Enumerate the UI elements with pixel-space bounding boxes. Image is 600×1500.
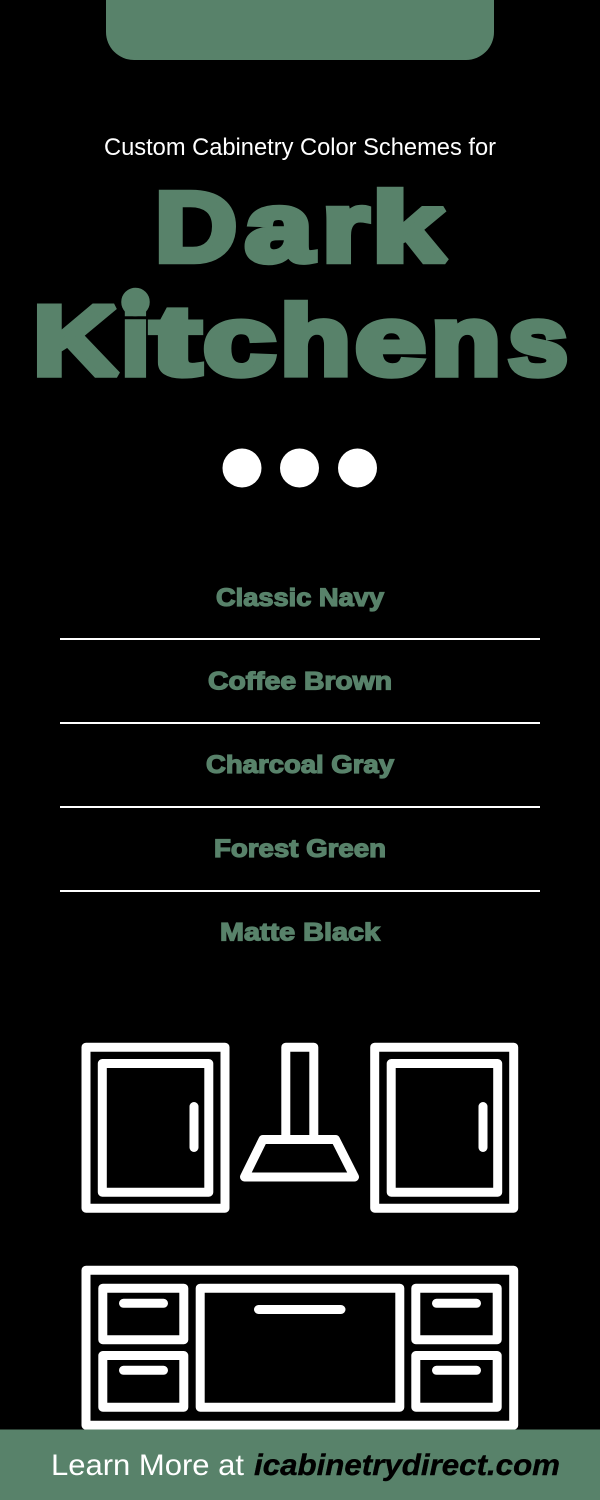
title: k xyxy=(372,172,446,282)
three dots xyxy=(222,448,377,488)
title: r xyxy=(322,172,369,282)
item: Classic Navy: Classic Navy xyxy=(216,584,384,612)
color scheme list xyxy=(60,584,540,946)
top tab xyxy=(106,0,494,60)
subtitle: Custom Cabinetry Color Schemes for xyxy=(104,134,496,161)
title: K xyxy=(33,286,118,396)
title xyxy=(33,172,568,396)
footer text: website: icabinetrydirect.com xyxy=(254,1449,560,1482)
icon: kitchen illustration xyxy=(86,1047,514,1425)
footer text: learn more: Learn More at xyxy=(51,1449,245,1482)
icon: range hood xyxy=(244,1047,354,1177)
item: Charcoal Gray: Charcoal Gray xyxy=(206,751,394,779)
title: t xyxy=(151,286,201,396)
title: D xyxy=(155,172,237,282)
footer bar xyxy=(0,1430,600,1500)
icon: right wall cabinet xyxy=(375,1047,514,1208)
item: Forest Green: Forest Green xyxy=(214,835,386,863)
icon: base cabinet with drawers xyxy=(86,1270,514,1425)
title: c xyxy=(203,286,276,396)
item: Coffee Brown: Coffee Brown xyxy=(208,668,392,696)
item: Matte Black: Matte Black xyxy=(220,918,380,946)
title: n xyxy=(431,286,501,396)
icon: left wall cabinet xyxy=(86,1047,225,1208)
title: h xyxy=(280,286,351,396)
title: s xyxy=(508,286,568,396)
title: i xyxy=(121,286,150,396)
title: e xyxy=(355,286,426,396)
title: a xyxy=(245,172,315,282)
